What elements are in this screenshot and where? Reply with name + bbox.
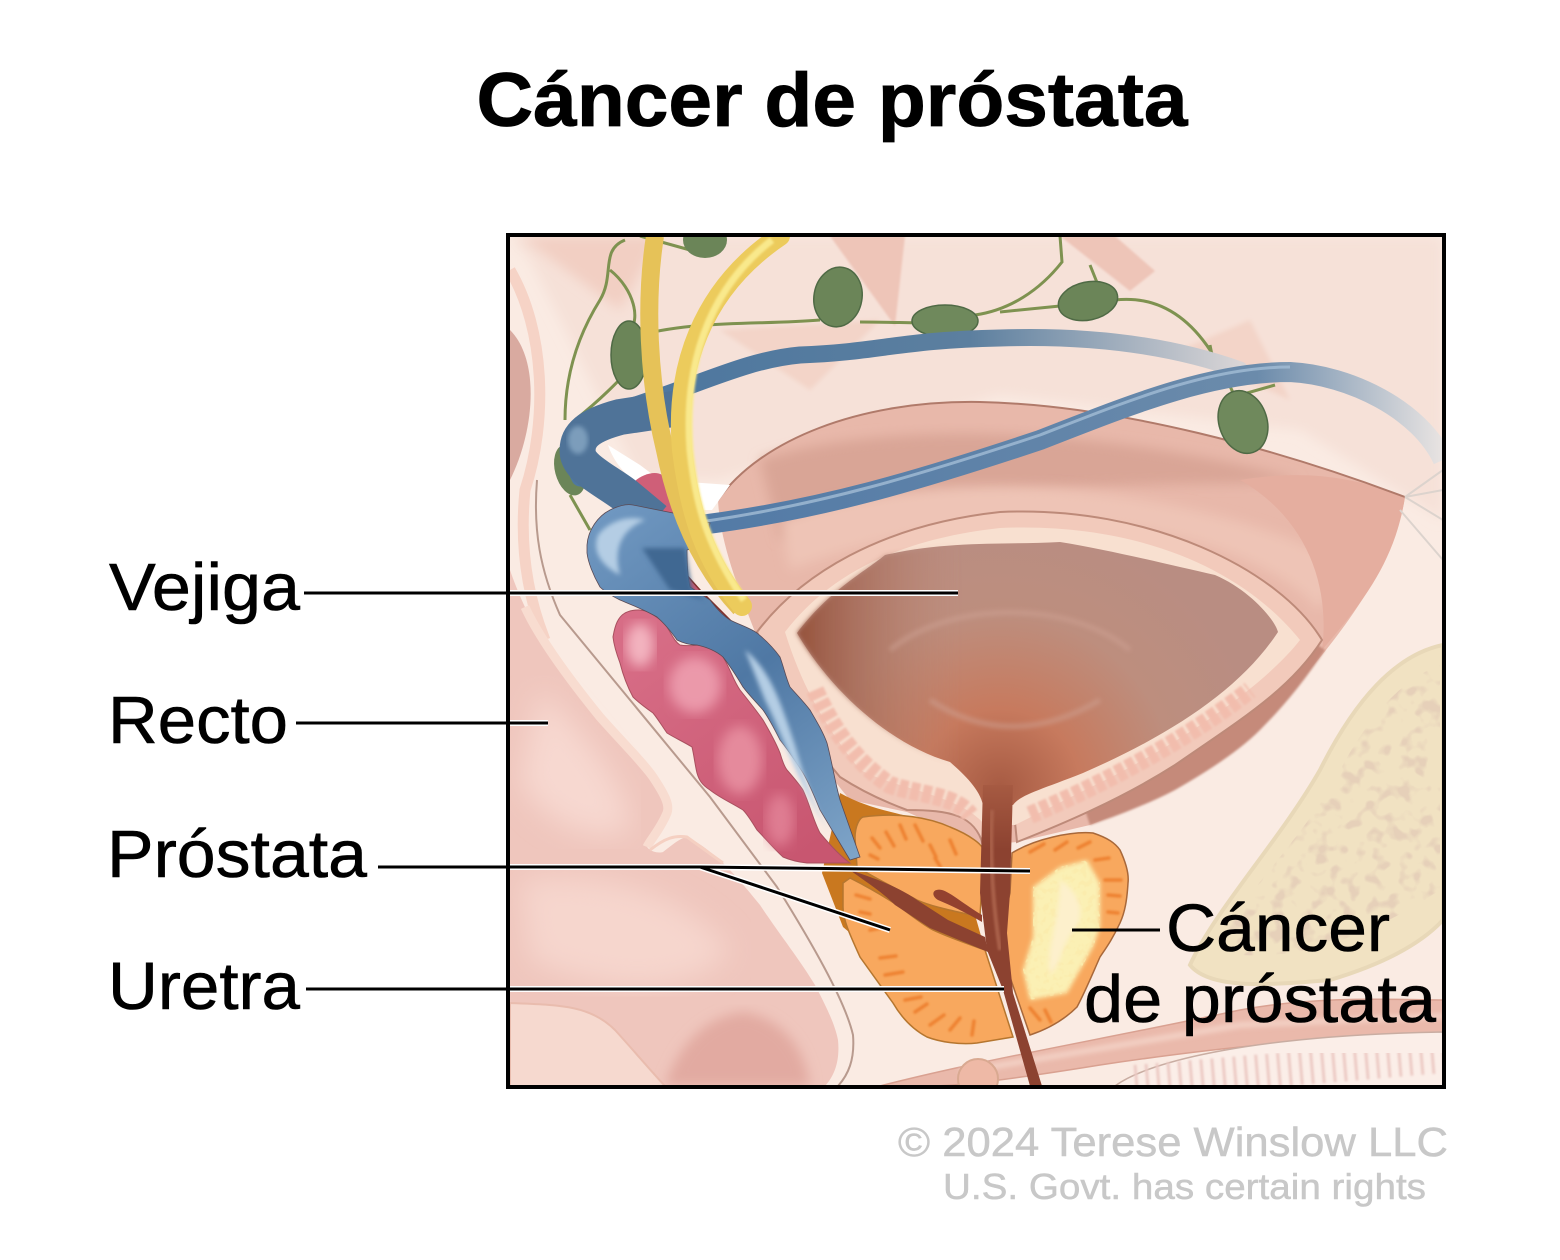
pelvic wall layers on left [510, 330, 531, 480]
leader line: Recto [296, 720, 548, 726]
label: Cáncer de próstata: de próstata [1084, 962, 1437, 1037]
tumor [1023, 860, 1100, 1000]
label: Cáncer de próstata: Cáncer [1166, 891, 1390, 966]
lower left lobe [843, 878, 1013, 1044]
copyright: U.S. Govt. has certain rights [943, 1166, 1426, 1207]
seminal vesicle [613, 610, 850, 863]
lymph vessels and nodes [549, 222, 1276, 530]
lower right tissues [880, 999, 1443, 1086]
label: Recto: Recto [108, 683, 288, 758]
bladder wall cut [757, 511, 1322, 845]
white gap behind vas [608, 445, 730, 510]
leader line: Uretra [306, 986, 1004, 992]
urethra [980, 785, 1042, 1086]
copyright [898, 1119, 1448, 1207]
ampulla [587, 505, 860, 860]
vas deferens [568, 337, 1443, 860]
rectum [510, 570, 838, 1086]
lower tube [700, 372, 1443, 525]
right lobe [1003, 833, 1128, 1035]
seminal vesicle interior sliver [688, 576, 732, 620]
ligament fibers [1400, 470, 1443, 560]
leader lines: Próstata [378, 867, 1030, 930]
outer muscle [718, 402, 1405, 845]
copyright: © 2024 Terese Winslow LLC [898, 1119, 1448, 1165]
leader line: Cáncer de próstata [1072, 928, 1160, 932]
upper left lobe [855, 815, 983, 917]
background tissue [510, 236, 1443, 1086]
bladder [718, 402, 1443, 845]
illustration border [508, 235, 1444, 1087]
label: Uretra: Uretra [108, 949, 301, 1024]
label: Vejiga: Vejiga [109, 550, 301, 625]
upper tube [572, 337, 1240, 478]
anatomical illustration panel [510, 222, 1443, 1099]
femoral bone [1190, 645, 1443, 984]
lumen [797, 542, 1278, 805]
label: Próstata: Próstata [107, 817, 368, 892]
label: Cáncer de próstata [1084, 891, 1437, 1037]
leader line: Vejiga [304, 590, 958, 596]
upper seminal vesicle [636, 473, 673, 513]
title: Cáncer de próstata [476, 58, 1188, 143]
prostate [822, 785, 1128, 1086]
ureter [649, 236, 780, 608]
gland ducts [856, 825, 1121, 1035]
